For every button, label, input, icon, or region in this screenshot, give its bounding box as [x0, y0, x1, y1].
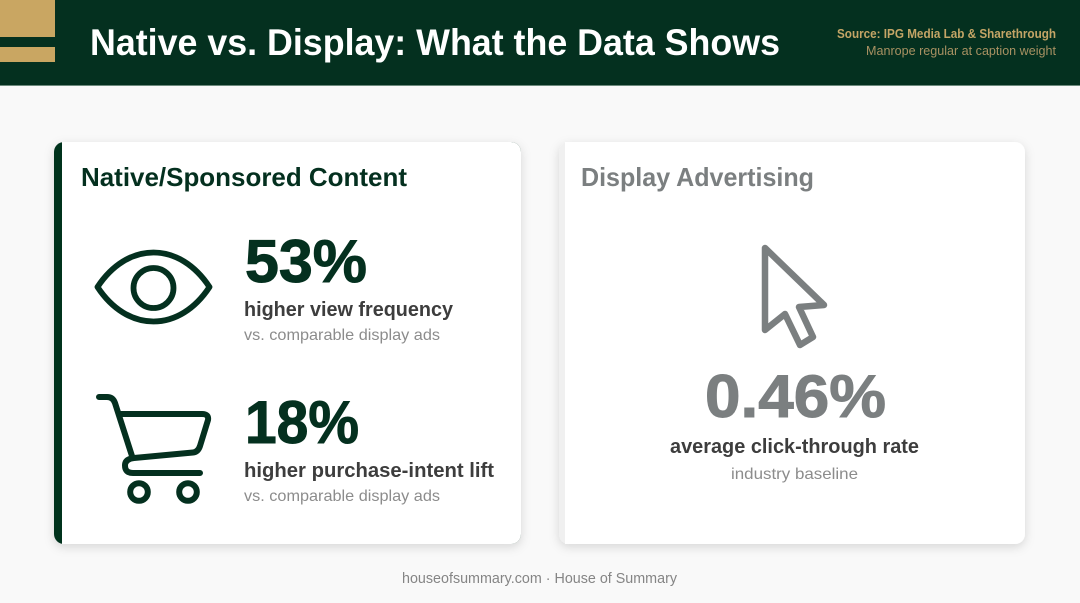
stat: 53%: vs. comparable display ads: [244, 327, 440, 344]
panel: native/sponsored content: [54, 142, 521, 544]
stat: 53%: 53%: [245, 228, 367, 295]
stat: 0.46%: industry baseline: [731, 466, 858, 483]
stat: 18%: 18%: [245, 389, 359, 456]
panel heading: display: Display Advertising: [581, 162, 814, 192]
icon: mouse cursor: [765, 248, 824, 345]
stat: 0.46%: 0.46%: [705, 363, 886, 430]
panel: display advertising: [559, 142, 1025, 544]
stat: 0.46%: average click-through rate: [670, 436, 919, 458]
stat: 53%: [244, 228, 454, 344]
stat: 18%: [244, 389, 494, 505]
source caption: Source: IPG Media Lab & Sharethrough: [837, 27, 1056, 41]
source caption: Manrope regular at caption weight: [866, 44, 1057, 58]
title: Native vs. Display: What the Data Shows: [90, 22, 780, 63]
icon: eye: [98, 252, 210, 322]
header accent: gold blocks: [0, 0, 55, 62]
stat: 18%: vs. comparable display ads: [244, 488, 440, 505]
panel heading: native: Native/Sponsored Content: [81, 162, 407, 192]
icon: shopping cart: [99, 397, 208, 501]
stat: 18%: higher purchase-intent lift: [244, 460, 494, 482]
stat: 53%: higher view frequency: [244, 299, 454, 321]
header band: [0, 0, 1080, 86]
source caption: [837, 27, 1057, 58]
stat: 0.46%: [670, 363, 919, 483]
footer: houseofsummary.com · House of Summary: [402, 571, 678, 587]
